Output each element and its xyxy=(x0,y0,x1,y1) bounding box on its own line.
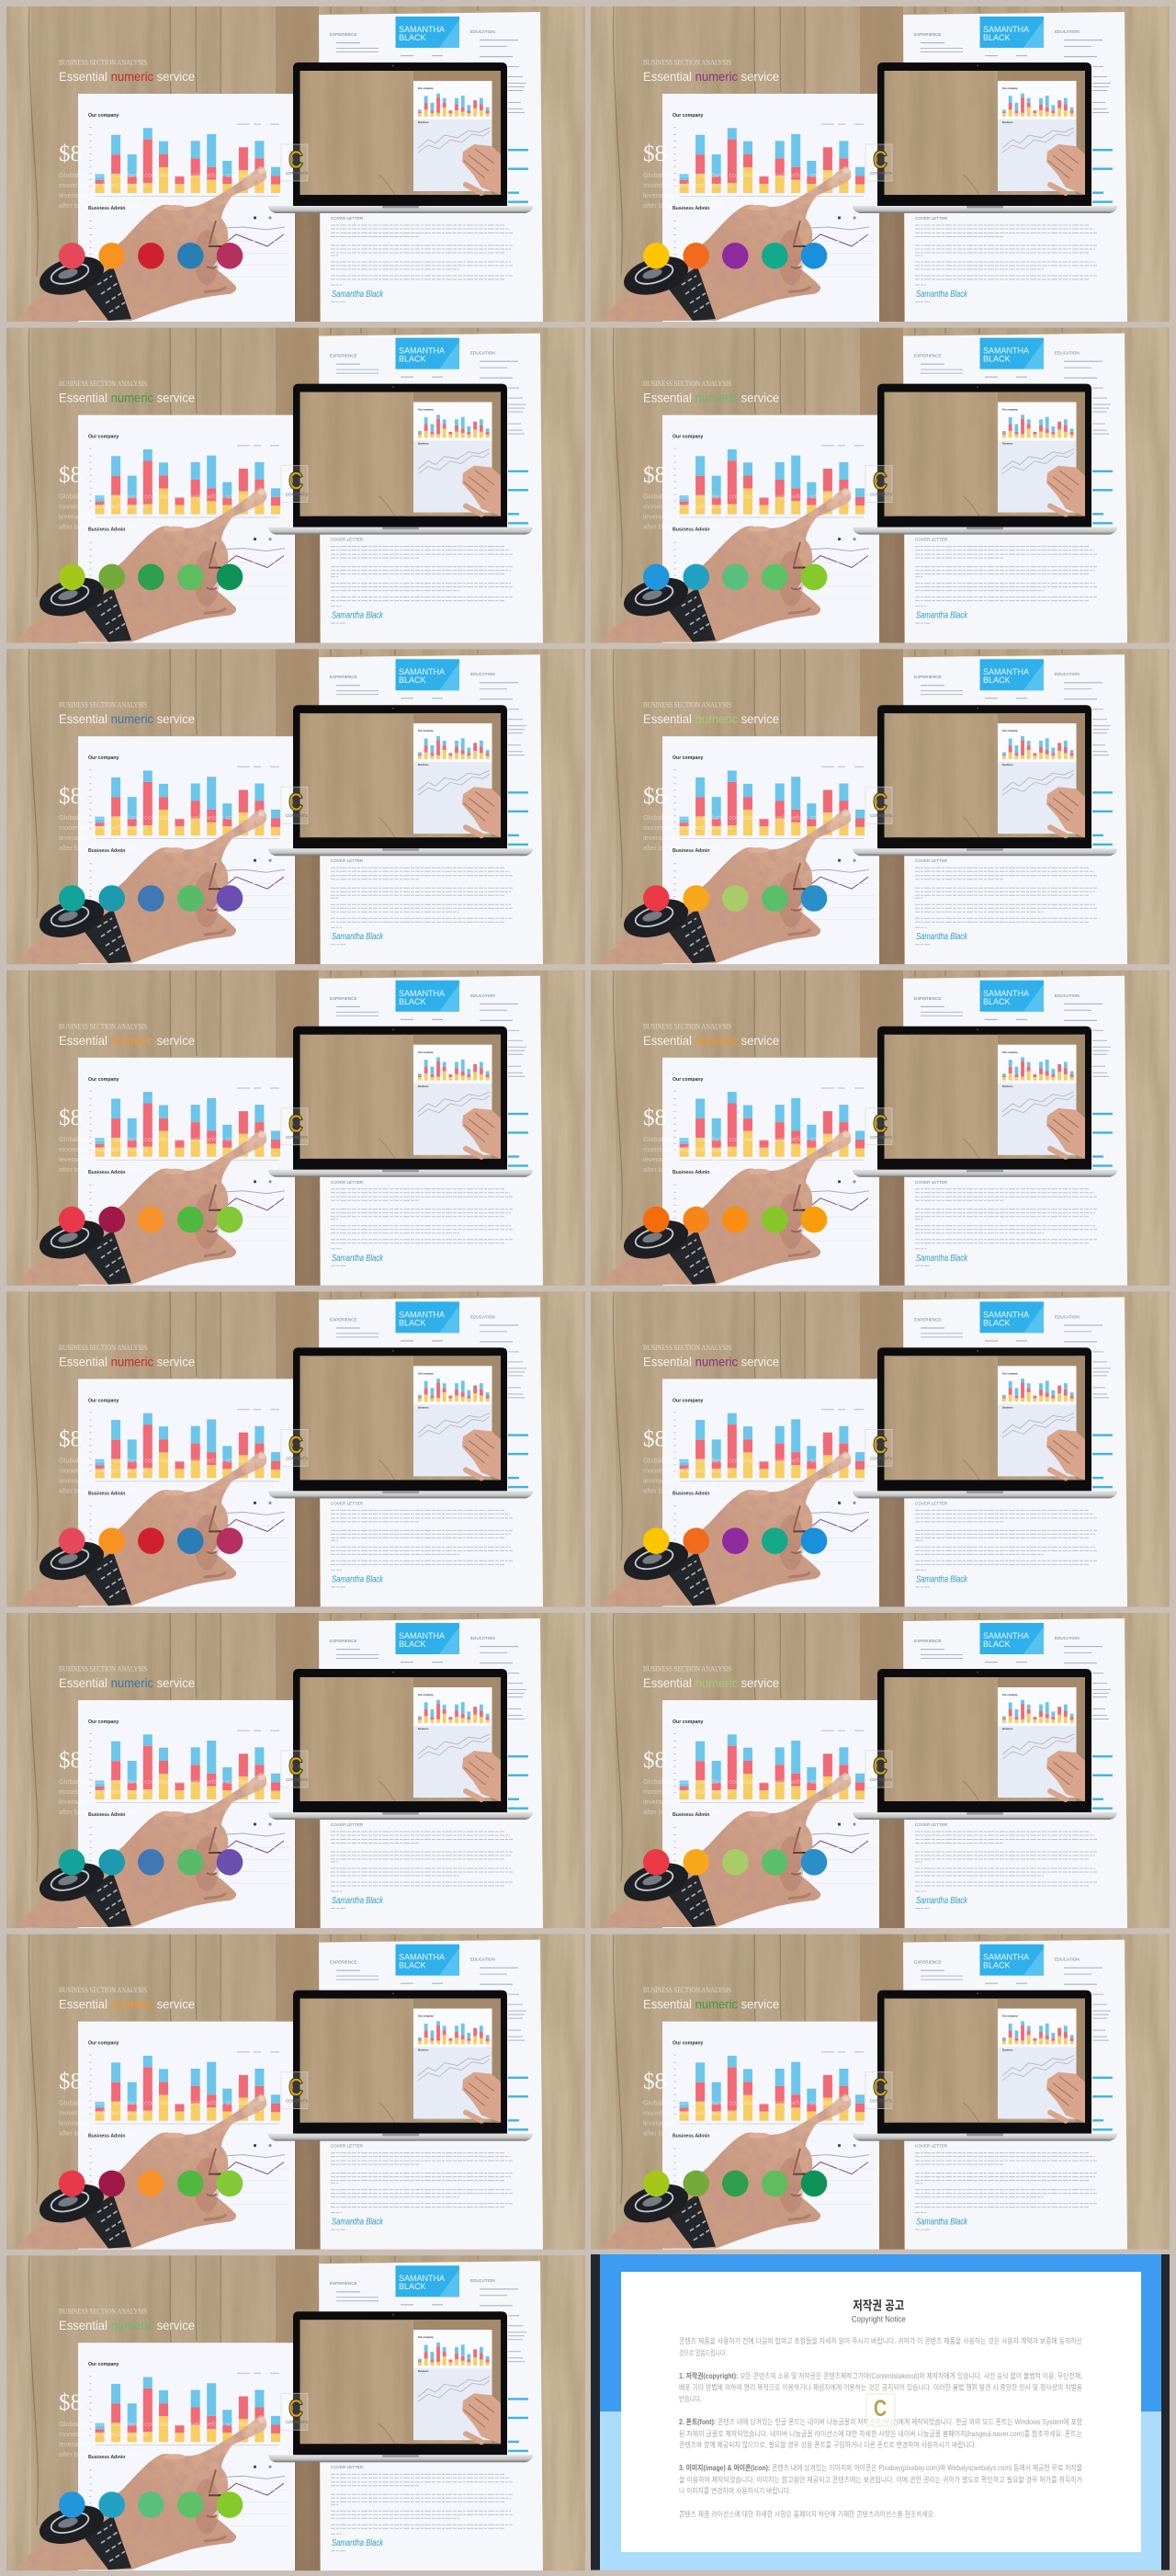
price and text block: leverage existing internal services xyxy=(643,191,745,199)
logo watermark xyxy=(866,2394,895,2426)
price and text block: after best-of-breed benefits xyxy=(59,1165,141,1174)
price and text block: monetize distributed solutions xyxy=(643,823,733,832)
price and text block: $8 xyxy=(59,2390,82,2415)
white notice card xyxy=(621,2272,1141,2552)
color swatches xyxy=(59,1207,243,1232)
eyebrow: BUSINESS SECTION ANALYSIS xyxy=(59,380,147,388)
photo scene xyxy=(591,970,1170,1286)
price and text block: after best-of-breed benefits xyxy=(643,844,725,852)
photo scene xyxy=(6,1935,585,2250)
photo scene xyxy=(6,1613,585,1928)
price and text block: monetize distributed solutions xyxy=(643,1466,733,1474)
price and text block: monetize distributed solutions xyxy=(59,1787,149,1796)
heading: Essential numeric service xyxy=(643,70,779,84)
price and text block: $8 xyxy=(59,2070,82,2094)
price and text block xyxy=(643,784,835,852)
price and text block: $8 xyxy=(643,1426,666,1451)
photo scene xyxy=(591,649,1170,964)
price and text block: leverage existing internal services xyxy=(643,1155,745,1163)
panel: slide 11 xyxy=(6,1613,585,1928)
price and text block: Globally incubate standards compliant channels before scalable xyxy=(643,1777,835,1786)
panel: slide 10 xyxy=(591,1291,1170,1606)
copyright subtitle: Copyright Notice xyxy=(852,2314,906,2323)
section 3: image and icon: 3. 이미지(image) & 아이콘(icon): 콘텐츠 내에 담겨있는 이미지와 아이콘은 Pixabay(pixabay.com)와 Webalys(webalys.com) 등에서 제공한 무료 저작물 xyxy=(679,2463,1082,2472)
price and text block: leverage existing internal services xyxy=(59,513,161,521)
price and text block: leverage existing internal services xyxy=(59,1798,161,1806)
price and text block: Globally incubate standards compliant channels before scalable xyxy=(643,2099,835,2107)
price and text block: monetize distributed solutions xyxy=(59,1145,149,1153)
color swatches xyxy=(643,2171,827,2196)
eyebrow: BUSINESS SECTION ANALYSIS xyxy=(643,59,731,66)
heading: Essential numeric service xyxy=(59,2319,195,2332)
section 2: font: 2. 폰트(font): 콘텐츠 내에 담겨있는 한글 폰트는 네이버 나눔글꼴의 저작권자 (무상)에게 제작되었습니다. 한글 외의 모드 폰트는 Windows System에 포함 xyxy=(679,2417,1082,2426)
price and text block: after best-of-breed benefits xyxy=(59,201,141,210)
panel: slide 15 xyxy=(6,2255,585,2570)
heading: Essential numeric service xyxy=(59,1998,195,2012)
intro paragraph xyxy=(679,2336,1082,2357)
price and text block: after best-of-breed benefits xyxy=(643,2129,725,2138)
color swatches xyxy=(643,885,827,912)
price and text block: Globally incubate standards compliant channels before scalable xyxy=(59,2099,251,2107)
photo scene xyxy=(591,328,1170,643)
price and text block: Globally incubate standards compliant channels before scalable xyxy=(643,493,835,501)
price and text block: monetize distributed solutions xyxy=(59,503,149,511)
eyebrow: BUSINESS SECTION ANALYSIS xyxy=(59,1022,147,1030)
eyebrow: BUSINESS SECTION ANALYSIS xyxy=(643,701,731,709)
price and text block: monetize distributed solutions xyxy=(643,503,733,511)
eyebrow: BUSINESS SECTION ANALYSIS xyxy=(643,1986,731,1994)
price and text block: $8 xyxy=(643,142,666,166)
photo scene xyxy=(591,1613,1170,1928)
heading: Essential numeric service xyxy=(643,1998,779,2012)
price and text block: monetize distributed solutions xyxy=(643,1787,733,1796)
intro paragraph: 콘텐츠 제품을 사용하기 전에 다음의 합의고 조항들을 자세히 읽어 주시기 바랍니다. 귀하가 이 콘텐츠 제품을 사용하는 것은 사용자 계약과 보증에 동의하신 xyxy=(679,2336,1082,2345)
panel: slide 9 xyxy=(6,1291,585,1606)
color swatches xyxy=(643,564,827,590)
price and text block xyxy=(59,2070,251,2138)
section 3: image and icon xyxy=(679,2463,1082,2495)
panel: slide 5 xyxy=(6,649,585,964)
closing line: 콘텐츠 제품 라이선스에 대한 자세한 사항은 홈페이지 하단에 기재한 콘텐츠라이선스를 참조하세요. xyxy=(679,2510,935,2519)
price and text block: Globally incubate standards compliant channels before scalable xyxy=(59,171,251,179)
price and text block: monetize distributed solutions xyxy=(643,2109,733,2117)
section 1: copyright: 받습니다. xyxy=(679,2394,702,2403)
section 1: copyright xyxy=(679,2371,1082,2403)
price and text block: Globally incubate standards compliant channels before scalable xyxy=(59,1135,251,1143)
panel: slide 13 xyxy=(6,1935,585,2250)
price and text block: $8 xyxy=(643,1748,666,1773)
price and text block: monetize distributed solutions xyxy=(59,181,149,189)
eyebrow: BUSINESS SECTION ANALYSIS xyxy=(59,59,147,66)
intro paragraph: 것으로 말씀드립니다. xyxy=(679,2348,727,2357)
price and text block: monetize distributed solutions xyxy=(59,2430,149,2438)
photo scene xyxy=(6,2255,585,2570)
heading: Essential numeric service xyxy=(59,712,195,726)
price and text block: leverage existing internal services xyxy=(59,1476,161,1484)
panel: slide 2 xyxy=(591,6,1170,322)
photo scene xyxy=(6,970,585,1286)
heading: Essential numeric service xyxy=(643,1676,779,1690)
price and text block: leverage existing internal services xyxy=(643,1476,745,1484)
panel: slide 8 xyxy=(591,970,1170,1286)
price and text block: $8 xyxy=(59,1106,82,1130)
price and text block: after best-of-breed benefits xyxy=(643,1165,725,1174)
copyright title: 저작권 공고 xyxy=(853,2299,904,2312)
price and text block: after best-of-breed benefits xyxy=(643,201,725,210)
price and text block: Globally incubate standards compliant channels before scalable xyxy=(59,1456,251,1464)
price and text block: after best-of-breed benefits xyxy=(59,2450,141,2458)
heading: Essential numeric service xyxy=(59,392,195,405)
price and text block xyxy=(59,1748,251,1816)
price and text block: Globally incubate standards compliant channels before scalable xyxy=(59,1777,251,1786)
price and text block: leverage existing internal services xyxy=(59,2119,161,2128)
price and text block: Globally incubate standards compliant channels before scalable xyxy=(59,2420,251,2428)
price and text block: after best-of-breed benefits xyxy=(59,1486,141,1494)
price and text block xyxy=(643,1106,835,1174)
eyebrow: BUSINESS SECTION ANALYSIS xyxy=(643,380,731,388)
price and text block: after best-of-breed benefits xyxy=(59,523,141,531)
eyebrow: BUSINESS SECTION ANALYSIS xyxy=(59,1665,147,1673)
heading: Essential numeric service xyxy=(59,1034,195,1048)
price and text block: after best-of-breed benefits xyxy=(643,523,725,531)
color swatches xyxy=(59,2171,243,2196)
color swatches xyxy=(643,1527,827,1554)
price and text block xyxy=(643,1748,835,1816)
price and text block: monetize distributed solutions xyxy=(643,1145,733,1153)
price and text block xyxy=(59,784,251,852)
section 3: image and icon: 나 이미지를 변경하여 사용하시기 바랍니다. xyxy=(679,2486,791,2495)
heading: Essential numeric service xyxy=(643,1355,779,1368)
color swatches xyxy=(59,243,243,269)
heading: Essential numeric service xyxy=(643,712,779,726)
price and text block: leverage existing internal services xyxy=(59,191,161,199)
price and text block: monetize distributed solutions xyxy=(59,1466,149,1474)
color swatches xyxy=(643,1849,827,1876)
price and text block: $8 xyxy=(59,1748,82,1773)
price and text block: $8 xyxy=(59,142,82,166)
price and text block: Globally incubate standards compliant channels before scalable xyxy=(643,171,835,179)
price and text block: $8 xyxy=(59,463,82,488)
heading: Essential numeric service xyxy=(59,1676,195,1690)
eyebrow: BUSINESS SECTION ANALYSIS xyxy=(59,1986,147,1994)
price and text block: leverage existing internal services xyxy=(59,1155,161,1163)
price and text block xyxy=(59,1106,251,1174)
price and text block: $8 xyxy=(643,463,666,488)
section 2: font: 콘텐츠와 함께 제공되지 않으므로, 필요할 경우 상용 폰트를 구입하거나 다른 폰트로 변경하여 사용하시기 바랍니다. xyxy=(679,2440,977,2449)
price and text block xyxy=(59,1426,251,1494)
price and text block: Globally incubate standards compliant channels before scalable xyxy=(643,813,835,822)
panel: slide 1 xyxy=(6,6,585,322)
color swatches xyxy=(59,1849,243,1876)
photo scene xyxy=(6,1291,585,1606)
section 1: copyright: 배포 기타 방법에 의하여 영리 목적으로 이용하거나 제삼자에게 이용하는 것은 금지되어 있습니다. 이러한 불법 행위 발견 시 중앙한 민사 및 형사상의 처벌을 xyxy=(679,2383,1082,2392)
price and text block xyxy=(59,463,251,531)
price and text block: after best-of-breed benefits xyxy=(59,1808,141,1816)
section 3: image and icon: 을 이용하여 제작되었습니다. 이미지는 참고용만 제공되고 콘텐츠에는 보관됩니다. 이에 관한 권리는 귀하가 별도로 확인하고 필요할 경우 허가를 취득하거 xyxy=(679,2475,1082,2484)
panel: slide 12 xyxy=(591,1613,1170,1928)
color swatches xyxy=(643,1207,827,1232)
price and text block: leverage existing internal services xyxy=(643,2119,745,2128)
price and text block: Globally incubate standards compliant channels before scalable xyxy=(59,493,251,501)
price and text block: $8 xyxy=(643,1106,666,1130)
eyebrow: BUSINESS SECTION ANALYSIS xyxy=(59,2308,147,2316)
price and text block: leverage existing internal services xyxy=(643,1798,745,1806)
color swatches xyxy=(643,243,827,269)
section 1: copyright: 1. 저작권(copyright): 모든 콘텐츠의 소유 및 저작권은 콘텐츠제작그가마(Contentstakeout)와 제작자에게 있습니다. 사전 승낙 없이 불법적 이용, 무단전재, xyxy=(679,2371,1082,2380)
price and text block: Globally incubate standards compliant channels before scalable xyxy=(59,813,251,822)
panel: slide 4 xyxy=(591,328,1170,643)
color swatches xyxy=(59,885,243,912)
color swatches xyxy=(59,1527,243,1554)
eyebrow: BUSINESS SECTION ANALYSIS xyxy=(643,1665,731,1673)
eyebrow: BUSINESS SECTION ANALYSIS xyxy=(59,1344,147,1352)
price and text block xyxy=(643,1426,835,1494)
logo watermark: C xyxy=(874,2396,887,2422)
price and text block: Globally incubate standards compliant channels before scalable xyxy=(643,1456,835,1464)
section 2: font: 된 자체의 글꼴로 제작되었습니다. 네이버 나눔글꼴 라이선스에 대한 자세한 사항은 네이버 나눔글꼴 홈페이지(hangeul.naver.com)를 참조하세요. 폰트는 xyxy=(679,2429,1082,2438)
price and text block: $8 xyxy=(643,2070,666,2094)
section 2: font xyxy=(679,2417,1082,2449)
price and text block: $8 xyxy=(59,1426,82,1451)
heading: Essential numeric service xyxy=(59,1355,195,1368)
price and text block: after best-of-breed benefits xyxy=(59,2129,141,2138)
price and text block xyxy=(59,2390,251,2458)
heading: Essential numeric service xyxy=(643,392,779,405)
price and text block: leverage existing internal services xyxy=(643,513,745,521)
photo scene xyxy=(6,649,585,964)
price and text block: leverage existing internal services xyxy=(643,834,745,842)
panel: slide 3 xyxy=(6,328,585,643)
photo scene xyxy=(6,6,585,322)
color swatches xyxy=(59,564,243,590)
price and text block: monetize distributed solutions xyxy=(59,2109,149,2117)
price and text block xyxy=(643,463,835,531)
photo scene xyxy=(591,6,1170,322)
photo scene xyxy=(591,1291,1170,1606)
price and text block: leverage existing internal services xyxy=(59,2440,161,2448)
price and text block xyxy=(643,142,835,210)
eyebrow: BUSINESS SECTION ANALYSIS xyxy=(59,701,147,709)
photo scene xyxy=(591,1935,1170,2250)
price and text block: after best-of-breed benefits xyxy=(643,1808,725,1816)
panel: slide 14 xyxy=(591,1935,1170,2250)
heading: Essential numeric service xyxy=(59,70,195,84)
price and text block: Globally incubate standards compliant channels before scalable xyxy=(643,1135,835,1143)
price and text block: monetize distributed solutions xyxy=(59,823,149,832)
price and text block: $8 xyxy=(59,784,82,809)
eyebrow: BUSINESS SECTION ANALYSIS xyxy=(643,1344,731,1352)
price and text block xyxy=(59,142,251,210)
photo scene xyxy=(6,328,585,643)
price and text block xyxy=(643,2070,835,2138)
price and text block: $8 xyxy=(643,784,666,809)
color swatches xyxy=(59,2491,243,2518)
panel: slide 7 xyxy=(6,970,585,1286)
heading: Essential numeric service xyxy=(643,1034,779,1048)
panel: slide 6 xyxy=(591,649,1170,964)
panel: copyright notice xyxy=(591,2254,1170,2570)
price and text block: after best-of-breed benefits xyxy=(643,1486,725,1494)
price and text block: leverage existing internal services xyxy=(59,834,161,842)
price and text block: monetize distributed solutions xyxy=(643,181,733,189)
eyebrow: BUSINESS SECTION ANALYSIS xyxy=(643,1022,731,1030)
price and text block: after best-of-breed benefits xyxy=(59,844,141,852)
